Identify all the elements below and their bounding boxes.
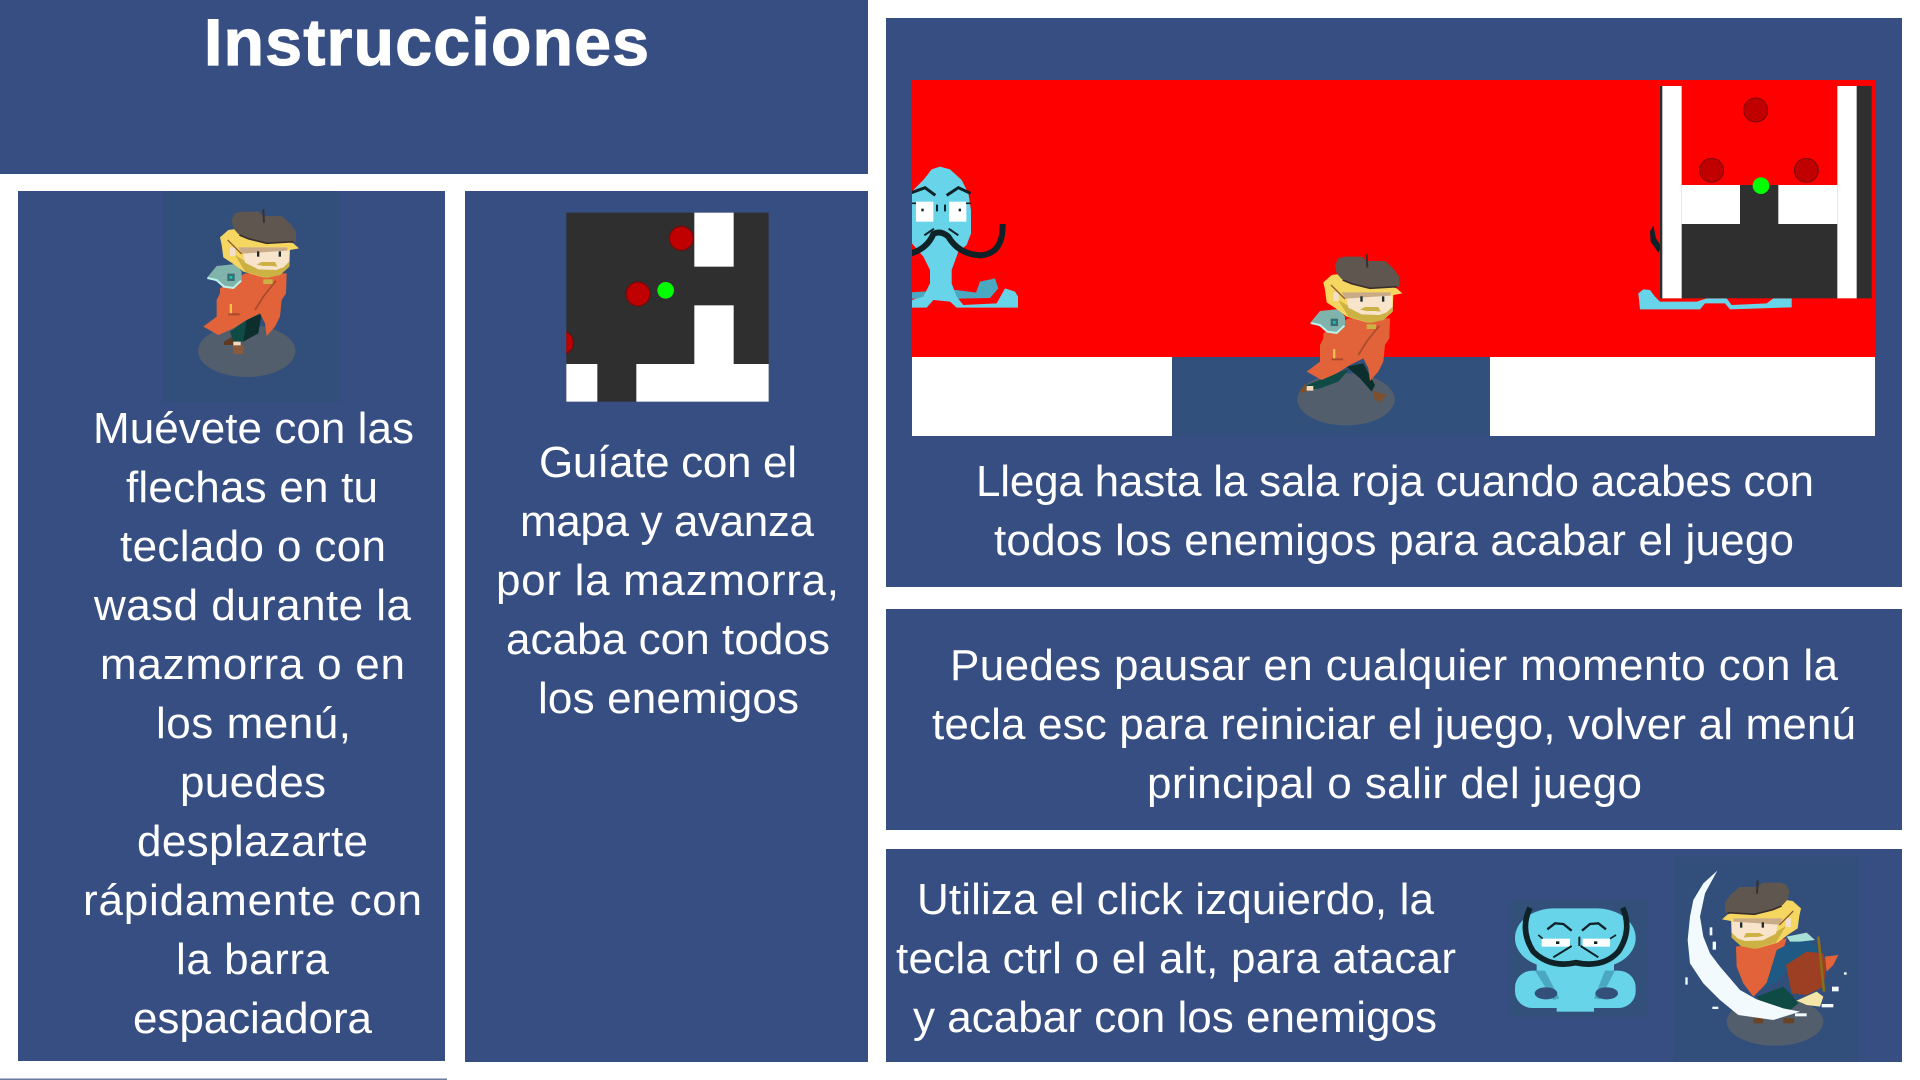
icon: hero attacking sprite: [1673, 857, 1858, 1062]
text: movement instructions: flechas en tu: [126, 463, 378, 512]
text: goal instructions: [976, 457, 1814, 565]
panel: goal room: [886, 18, 1902, 587]
panel: movement: [18, 191, 445, 1061]
panel: pause: [886, 609, 1902, 830]
panel: title: [0, 0, 868, 174]
text: movement instructions: [83, 404, 422, 1043]
icon: room minimap: [1660, 86, 1872, 298]
icon: hero walking sprite: [163, 191, 340, 402]
text: attack instructions: tecla ctrl o el alt, para atacar: [896, 934, 1456, 983]
text: movement instructions: teclado o con: [120, 522, 386, 571]
text: goal instructions: Llega hasta la sala roja cuando acabes con: [976, 457, 1814, 506]
text: movement instructions: wasd durante la: [93, 581, 412, 630]
text: attack instructions: [896, 875, 1456, 1042]
icon: hero running sprite: [1297, 254, 1402, 425]
text: attack instructions: Utiliza el click izquierdo, la: [917, 875, 1435, 924]
panel: attack: [886, 849, 1902, 1062]
text: movement instructions: los menú,: [156, 699, 351, 748]
text: pause instructions: principal o salir del juego: [1147, 759, 1642, 808]
text: map instructions: por la mazmorra,: [496, 556, 839, 605]
text: pause instructions: tecla esc para reiniciar el juego, volver al menú: [932, 700, 1856, 749]
text: attack instructions: y acabar con los enemigos: [913, 993, 1437, 1042]
text: movement instructions: la barra: [176, 935, 330, 984]
text: map instructions: [496, 438, 839, 723]
panel: map: [465, 191, 868, 1062]
title: Instrucciones: [204, 5, 649, 79]
text: movement instructions: desplazarte: [137, 817, 368, 866]
text: movement instructions: mazmorra o en: [100, 640, 405, 689]
game screenshot: red room: [903, 80, 1875, 436]
icon: squat mustached enemy: [1510, 900, 1647, 1017]
icon: dungeon minimap: [549, 213, 769, 402]
text: movement instructions: espaciadora: [133, 994, 373, 1043]
text: pause instructions: Puedes pausar en cualquier momento con la: [950, 641, 1839, 690]
text: map instructions: los enemigos: [538, 674, 799, 723]
icon: tall mustached enemy: [903, 167, 1018, 308]
text: movement instructions: rápidamente con: [83, 876, 422, 925]
text: goal instructions: todos los enemigos para acabar el juego: [994, 516, 1794, 565]
icon: enemy feet behind the minimap: [1638, 225, 1792, 309]
text: map instructions: mapa y avanza: [520, 497, 815, 546]
text: movement instructions: Muévete con las: [93, 404, 414, 453]
text: movement instructions: puedes: [180, 758, 326, 807]
text: pause instructions: [932, 641, 1856, 808]
text: map instructions: Guíate con el: [539, 438, 797, 487]
text: map instructions: acaba con todos: [506, 615, 830, 664]
